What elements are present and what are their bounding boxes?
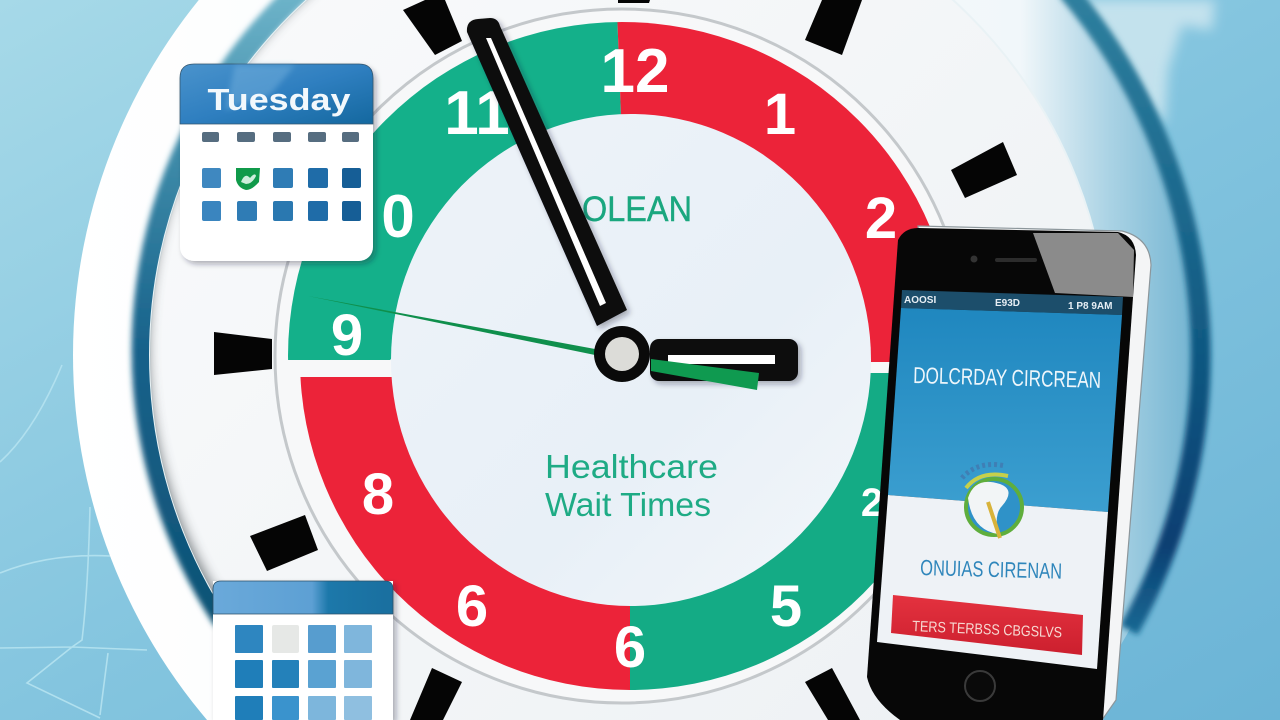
clock face <box>140 0 1110 720</box>
header highlight <box>225 65 295 110</box>
glass reflection <box>1033 233 1134 297</box>
clock numerals: 0 <box>381 183 415 250</box>
status bar <box>901 290 1123 315</box>
speaker and camera <box>970 256 1037 262</box>
title: Healthcare Wait Times: Wait Times <box>545 486 711 523</box>
second hand <box>308 296 595 355</box>
home button <box>965 671 995 701</box>
clock numerals: 2 <box>865 186 897 251</box>
hour tick marks <box>214 0 1017 720</box>
app screen blue <box>888 308 1122 512</box>
title: Healthcare Wait Times <box>545 448 718 523</box>
brand word: OLEAN <box>582 190 692 229</box>
calendar header <box>180 64 373 124</box>
minute hand <box>467 18 627 326</box>
clock numerals <box>331 37 897 680</box>
status bar: AOOSI <box>904 295 936 306</box>
clock numerals: 1 <box>764 82 796 147</box>
phone metal frame <box>918 226 1151 720</box>
ring segment: red 6 to 9 <box>295 377 630 700</box>
second hand tail <box>651 359 759 390</box>
title: Healthcare Wait Times: Healthcare <box>545 448 718 485</box>
calendar: grid <box>213 581 393 720</box>
grid calendar cells <box>235 625 372 720</box>
clock numerals: 11 <box>444 79 510 148</box>
smartphone <box>867 226 1151 720</box>
coloured wait-time ring <box>288 22 930 690</box>
grid calendar header <box>213 581 393 614</box>
clock numerals: 6 <box>614 615 646 680</box>
app logo <box>962 464 1022 538</box>
ring segment: green 3 to 6 <box>630 373 889 690</box>
clock numerals: 9 <box>331 303 363 368</box>
red call-to-action button <box>891 595 1083 655</box>
calendar heading: Tuesday <box>208 82 351 117</box>
clock numerals: 12 <box>601 37 669 106</box>
clock numerals: 8 <box>362 462 394 527</box>
app screen white <box>877 495 1108 669</box>
day cells <box>202 168 361 221</box>
clock numerals: 2 <box>861 481 883 525</box>
clock numerals: 5 <box>770 574 802 639</box>
screen heading: DOLCRDAY CIRCREAN <box>913 362 1101 393</box>
status bar: E93D <box>995 298 1020 309</box>
centre hub <box>594 326 650 382</box>
ring segment: green 9 to 12 <box>280 10 621 360</box>
hour hand <box>650 339 798 381</box>
ring centre disc <box>391 114 871 606</box>
red call-to-action button: TERS TERBSS CBGSLVS <box>912 618 1062 642</box>
screen subheading: ONUIAS CIRENAN <box>920 555 1062 584</box>
clock numerals: 6 <box>456 574 488 639</box>
weekday markers <box>202 132 359 142</box>
status bar: 1 P8 9AM <box>1068 301 1112 312</box>
calendar: Tuesday <box>180 64 373 261</box>
highlighted day icon <box>236 168 260 190</box>
ring segment: red 12 to 3 <box>617 22 930 362</box>
phone body <box>867 228 1136 720</box>
